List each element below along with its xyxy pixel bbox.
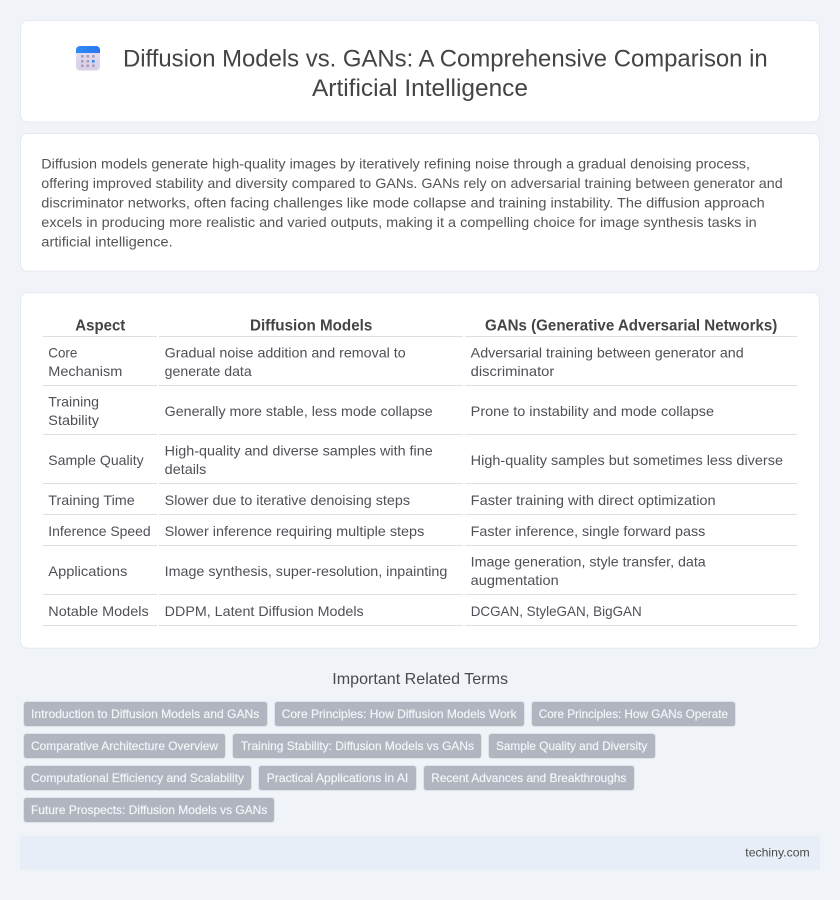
tag <box>24 734 226 758</box>
panel: introduction text: offering improved stability and diversity compared to GANs. GANs rely on adversarial training between generator and <box>41 175 783 191</box>
footer <box>20 836 820 870</box>
row: inference speed <box>48 523 705 539</box>
panel: introduction text <box>20 134 820 271</box>
row: sample quality <box>48 443 783 477</box>
row: training stability: Generally more stable, less mode collapse <box>165 403 433 419</box>
row: sample quality: details <box>165 461 206 477</box>
row: notable models: DDPM, Latent Diffusion Models <box>165 603 364 619</box>
table header row: Diffusion Models <box>250 318 372 335</box>
tag <box>532 702 736 726</box>
row: training time <box>48 492 716 508</box>
row: training time: Slower due to iterative denoising steps <box>165 492 410 508</box>
row: core mechanism: Gradual noise addition and removal to <box>165 345 406 361</box>
row: training stability: Training <box>48 394 99 410</box>
row: applications <box>48 554 706 588</box>
icon: calendar <box>76 46 100 70</box>
row: sample quality: Sample Quality <box>48 452 144 468</box>
row: training stability: Stability <box>48 412 99 428</box>
row: applications: Image synthesis, super-resolution, inpainting <box>165 563 447 579</box>
tag <box>424 766 634 790</box>
row: applications: augmentation <box>471 572 559 588</box>
tag: Core Principles: How Diffusion Models Work <box>282 707 518 721</box>
row: training stability: Prone to instability and mode collapse <box>471 403 714 419</box>
tag <box>258 766 416 790</box>
row: core mechanism: Adversarial training between generator and <box>471 345 744 361</box>
tag: Practical Applications in AI <box>267 771 408 785</box>
row: notable models: Notable Models <box>48 603 149 619</box>
row: core mechanism: discriminator <box>471 363 555 379</box>
row: training stability <box>48 394 714 428</box>
row: sample quality: High-quality and diverse samples with fine <box>165 443 433 459</box>
row: inference speed: Slower inference requiring multiple steps <box>165 523 424 539</box>
row: notable models: DCGAN, StyleGAN, BigGAN <box>471 603 642 619</box>
row: inference speed: Inference Speed <box>48 523 151 539</box>
footer: techiny.com <box>745 846 810 860</box>
tag <box>24 766 252 790</box>
tag <box>232 734 482 758</box>
row: inference speed: Faster inference, single forward pass <box>471 523 705 539</box>
row: core mechanism: Mechanism <box>48 363 122 379</box>
row: applications: Applications <box>48 563 127 579</box>
title <box>123 46 768 102</box>
tag <box>274 702 524 726</box>
tag: Computational Efficiency and Scalability <box>31 771 244 785</box>
tag list: related terms <box>24 702 736 822</box>
panel: introduction text: excels in producing more realistic and varied outputs, making it a compelling choice for image synthesis tasks in <box>41 214 757 230</box>
panel: introduction text: Diffusion models generate high-quality images by iteratively refining noise through a gradual denoising process, <box>41 155 750 171</box>
title: Diffusion Models vs. GANs: A Comprehensive Comparison in <box>123 46 768 72</box>
panel: introduction text: artificial intelligence. <box>41 233 173 249</box>
heading: related terms: Important Related Terms <box>332 671 508 688</box>
table header row <box>75 318 777 335</box>
tag: Training Stability: Diffusion Models vs GANs <box>241 739 474 753</box>
panel: introduction text: discriminator networks, often facing challenges like mode collapse and training instability. The diffusion approach <box>41 194 765 210</box>
row: training time: Faster training with direct optimization <box>471 492 716 508</box>
tag: Future Prospects: Diffusion Models vs GANs <box>31 803 267 817</box>
tag <box>488 734 656 758</box>
row: core mechanism: Core <box>48 345 77 361</box>
row: core mechanism <box>48 345 744 379</box>
table header row: GANs (Generative Adversarial Networks) <box>485 318 777 335</box>
tag: Sample Quality and Diversity <box>496 739 647 753</box>
tag: Core Principles: How GANs Operate <box>539 707 728 721</box>
row: applications: Image generation, style transfer, data <box>471 554 706 570</box>
row: notable models <box>48 603 642 619</box>
tag <box>24 798 274 822</box>
table header row: Aspect <box>75 318 126 335</box>
title: Artificial Intelligence <box>312 75 528 102</box>
row: sample quality: High-quality samples but sometimes less diverse <box>471 452 783 468</box>
row: core mechanism: generate data <box>165 363 252 379</box>
tag: Recent Advances and Breakthroughs <box>431 771 626 785</box>
panel: comparison table <box>20 293 820 648</box>
tag <box>24 702 268 726</box>
row: training time: Training Time <box>48 492 135 508</box>
tag: Comparative Architecture Overview <box>31 739 218 753</box>
tag: Introduction to Diffusion Models and GANs <box>31 707 259 721</box>
panel: header <box>20 20 820 122</box>
